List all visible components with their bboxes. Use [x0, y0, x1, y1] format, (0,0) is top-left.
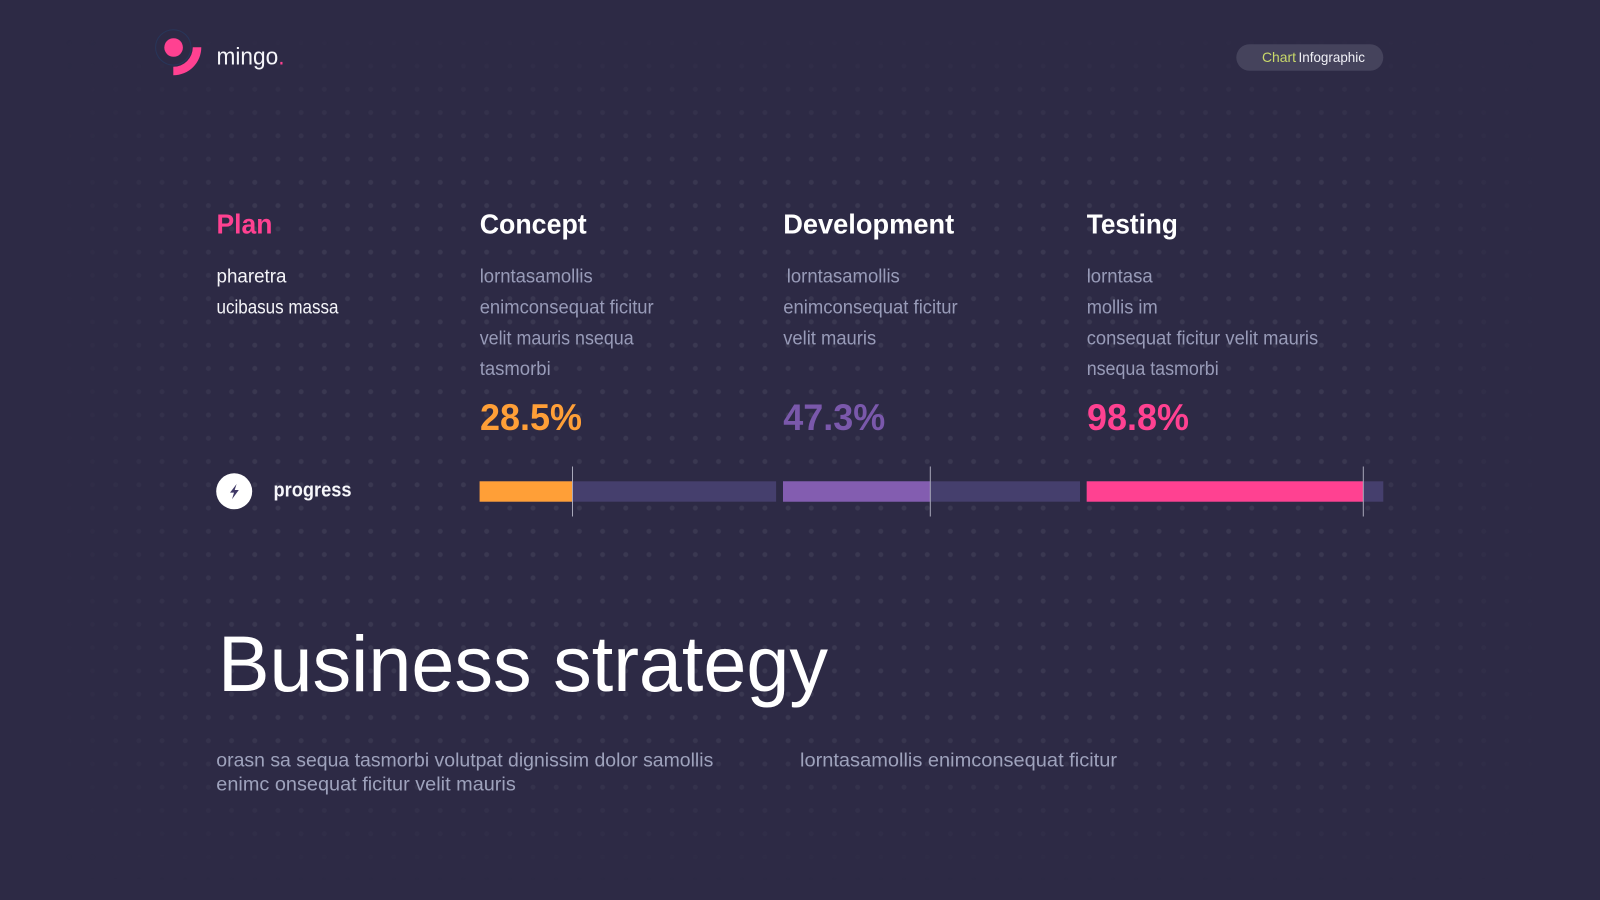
icon: lightning bolt [216, 473, 252, 509]
panel: plan [216, 208, 339, 319]
bar: concept 28.5% [480, 466, 776, 516]
value: concept: 28.5% [480, 397, 582, 438]
progress label [216, 473, 352, 509]
footer text left: enimc onsequat ficitur velit mauris [216, 774, 516, 796]
heading: testing: Testing [1087, 208, 1178, 239]
badge: chart infographic: Chart [1262, 49, 1296, 65]
title: Business strategy [218, 619, 828, 708]
value: testing: 98.8% [1087, 397, 1189, 438]
development description: lorntasamollis [787, 267, 900, 288]
bar: development 47.3% [783, 466, 1080, 516]
badge: chart infographic: Infographic [1298, 49, 1365, 65]
panel: concept [480, 208, 654, 438]
plan description: pharetra [216, 267, 287, 288]
testing description [1087, 267, 1318, 380]
progress bars [480, 466, 1383, 516]
footer text left [216, 749, 714, 796]
concept description: tasmorbi [480, 359, 551, 380]
plan description: ucibasus massa [216, 298, 339, 319]
plan description [216, 267, 339, 319]
badge: chart infographic [1236, 44, 1383, 71]
logo [156, 30, 284, 75]
logo wordmark: mingo. [216, 43, 284, 70]
panel: testing [1087, 208, 1318, 438]
development description: velit mauris [783, 329, 876, 350]
heading: development: Development [783, 208, 954, 239]
concept description: lorntasamollis [480, 267, 593, 288]
footer text right: lorntasamollis enimconsequat ficitur [800, 749, 1118, 771]
testing description: nsequa tasmorbi [1087, 359, 1219, 380]
value: development: 47.3% [783, 397, 885, 438]
heading: concept: Concept [480, 208, 587, 239]
progress label: progress [274, 480, 352, 502]
bar: testing 98.8% [1087, 466, 1383, 516]
development description: enimconsequat ficitur [783, 298, 958, 319]
concept description: enimconsequat ficitur [480, 298, 654, 319]
testing description: mollis im [1087, 298, 1158, 319]
panel: development [783, 208, 958, 438]
logo mark [156, 30, 201, 75]
concept description [480, 267, 654, 380]
development description [783, 267, 958, 350]
testing description: lorntasa [1087, 267, 1153, 288]
testing description: consequat ficitur velit mauris [1087, 329, 1318, 350]
concept description: velit mauris nsequa [480, 329, 634, 350]
footer text left: orasn sa sequa tasmorbi volutpat dignissim dolor samollis [216, 749, 714, 771]
heading: plan: Plan [216, 208, 272, 239]
